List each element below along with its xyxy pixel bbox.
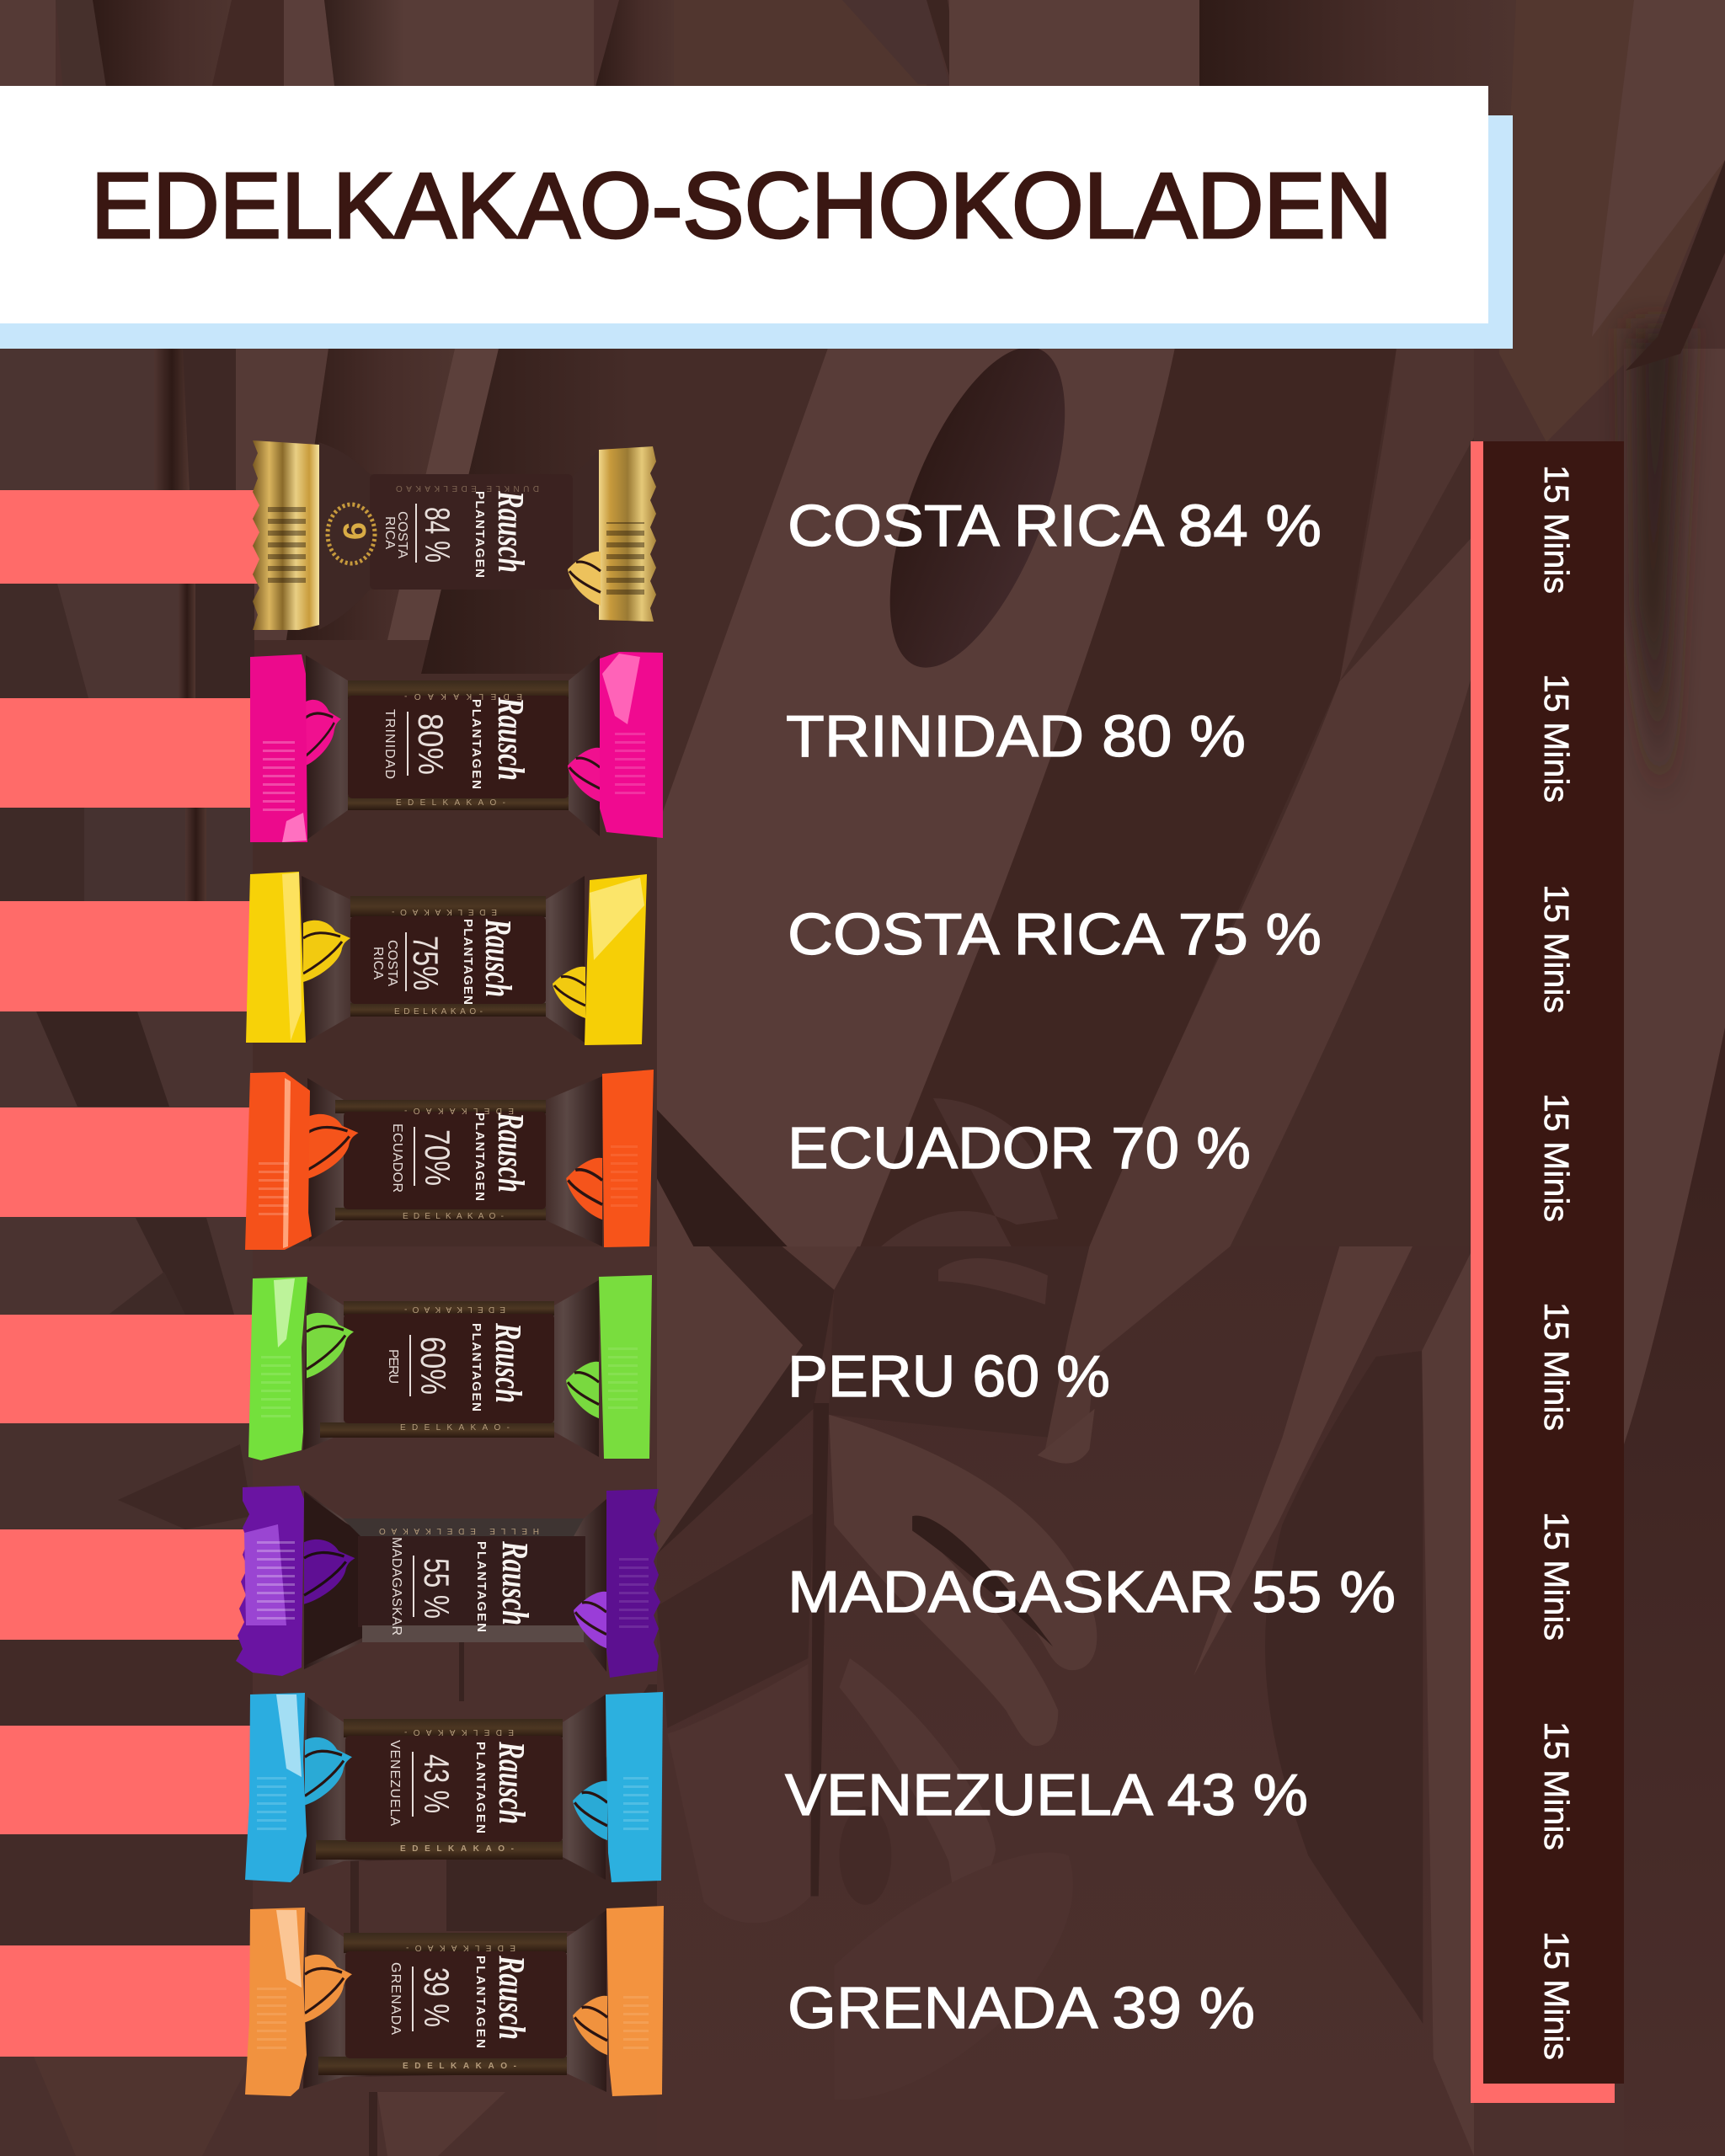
background: candy gap detail [350, 1642, 657, 2156]
candy: Trinidad 80 pink: EDELKAKAO- [404, 691, 522, 701]
candy: Grenada 39 light orange: 39 % [417, 1967, 457, 2027]
candy: Costa Rica 75 yellow: RICA [371, 947, 385, 979]
candy: Madagaskar 55 purple: HELLE EDELKAKAO [379, 1526, 539, 1535]
candy: Trinidad 80 pink [250, 652, 663, 842]
gold left flap [253, 440, 319, 630]
background: central leaf with hole [657, 320, 1474, 1246]
chocolate name labels: PERU 60 % [788, 1343, 1110, 1409]
panel text: 15 Minis [1537, 1512, 1576, 1641]
candy: Madagaskar 55 purple: 55 % [417, 1558, 457, 1619]
panel dark block [1483, 441, 1624, 2084]
candy: Grenada 39 light orange: EDELKAKAO- [406, 1943, 515, 1952]
coral bars [0, 490, 263, 2057]
candy: Ecuador 70 orange [245, 1070, 654, 1250]
background: right-hand column [1624, 160, 1725, 2156]
candy: Peru 60 green: Rausch [488, 1322, 529, 1403]
chocolate name labels: TRINIDAD 80 % [786, 703, 1246, 769]
chocolate name labels [785, 493, 1396, 2041]
candy: Grenada 39 light orange: Rausch [491, 1955, 532, 2040]
candy: Costa Rica 84 gold: RICA [382, 516, 397, 549]
title panel [0, 86, 1513, 349]
candy: Costa Rica 84 gold: 84 % [418, 507, 457, 563]
seal [328, 504, 375, 563]
candy: Venezuela 43 blue: Rausch [491, 1741, 532, 1824]
chocolate name labels: COSTA RICA 84 % [788, 493, 1322, 558]
green right flap [599, 1275, 652, 1459]
right bean [568, 552, 601, 606]
candy: Grenada 39 light orange: PLANTAGEN [473, 1956, 488, 2048]
yellow left flap [246, 872, 306, 1043]
panel text: 15 Minis [1537, 1931, 1576, 2060]
candy: Venezuela 43 blue [245, 1692, 663, 1882]
label: Rausch [490, 490, 531, 573]
chocolate name labels: VENEZUELA 43 % [785, 1762, 1308, 1828]
candy: Costa Rica 75 yellow: Rausch [478, 918, 519, 997]
candy: Costa Rica 84 gold: DUNKLE EDELKAKAO [396, 483, 539, 493]
light orange right flap [606, 1906, 664, 2096]
candy: Costa Rica 75 yellow: PLANTAGEN [461, 919, 475, 1005]
candy: Madagaskar 55 purple: MADAGASKAR [389, 1537, 403, 1636]
candy: Ecuador 70 orange: EDELKAKAO- [403, 1212, 504, 1221]
candy: Grenada 39 light orange [245, 1906, 664, 2096]
candy: Peru 60 green: EDELKAKAO- [404, 1305, 505, 1314]
candy: Peru 60 green: PLANTAGEN [469, 1323, 483, 1412]
panel text: 15 Minis [1537, 1093, 1576, 1222]
candy: Madagaskar 55 purple [236, 1486, 660, 1678]
candy: Costa Rica 75 yellow [246, 872, 647, 1045]
candy: Peru 60 green [248, 1275, 652, 1460]
green left flap [248, 1277, 307, 1460]
blue right flap [606, 1692, 663, 1882]
candy: Costa Rica 75 yellow: EDELKAKAO- [392, 907, 497, 916]
candy: Peru 60 green: 60% [414, 1337, 453, 1395]
purple left flap [236, 1486, 304, 1676]
candy: Trinidad 80 pink: EDELKAKAO- [396, 798, 505, 808]
pink left flap [250, 654, 307, 842]
left column folds [0, 584, 88, 698]
chocolate name labels: GRENADA 39 % [788, 1975, 1255, 2041]
panel text: 15 Minis [1537, 1721, 1576, 1850]
folds beneath header [0, 349, 154, 490]
candy: Costa Rica 84 gold: COSTA [395, 511, 409, 558]
title shadow block [0, 115, 1513, 349]
chocolate name labels: MADAGASKAR 55 % [788, 1559, 1396, 1625]
candy: Costa Rica 84 gold [253, 440, 656, 630]
panel text: 15 Minis [1537, 674, 1576, 803]
candy: Madagaskar 55 purple: PLANTAGEN [474, 1541, 489, 1632]
background: lower monstera leaf [657, 1246, 1474, 2156]
chocolate name labels: ECUADOR 70 % [788, 1115, 1251, 1181]
candy: Costa Rica 84 gold: PLANTAGEN [473, 491, 487, 578]
panel coral backing [1471, 441, 1615, 2103]
gold right flap [599, 446, 656, 622]
panel text: 15 Minis [1537, 465, 1576, 594]
orange left flap [245, 1072, 312, 1250]
candy: Ecuador 70 orange: EDELKAKAO- [404, 1106, 514, 1115]
candy: Peru 60 green: EDELKAKAO- [400, 1423, 510, 1433]
candy: Costa Rica 84 gold: 9 [336, 522, 371, 540]
candy: Venezuela 43 blue: VENEZUELA [387, 1740, 402, 1826]
title white block [0, 86, 1488, 323]
light orange left flap [245, 1908, 307, 2096]
panel text: 15 Minis [1537, 1302, 1576, 1431]
purple right flap [606, 1489, 660, 1678]
candy: Trinidad 80 pink: TRINIDAD [382, 709, 397, 779]
panel text: 15 Minis [1537, 884, 1576, 1013]
candy: Ecuador 70 orange: ECUADOR [390, 1123, 404, 1193]
blue left flap [245, 1693, 307, 1882]
candy: Venezuela 43 blue: PLANTAGEN [473, 1742, 488, 1833]
candy: Trinidad 80 pink: 80% [411, 713, 451, 775]
yellow right flap [585, 874, 647, 1045]
pink right flap [600, 652, 663, 838]
title text: EDELKAKAO-SCHOKOLADEN [91, 154, 1392, 258]
candy: Trinidad 80 pink: Rausch [490, 696, 531, 781]
candy: Costa Rica 75 yellow: COSTA [385, 940, 399, 986]
panel text [1537, 465, 1576, 2060]
candy: Grenada 39 light orange: EDELKAKAO- [403, 2062, 516, 2071]
candy: Grenada 39 light orange: GRENADA [388, 1962, 403, 2035]
candy: Venezuela 43 blue: EDELKAKAO- [404, 1727, 514, 1737]
candy: Ecuador 70 orange: PLANTAGEN [473, 1113, 487, 1201]
candy: Costa Rica 75 yellow: EDELKAKAO- [394, 1007, 483, 1017]
candy: Ecuador 70 orange: Rausch [490, 1112, 531, 1193]
candy: Venezuela 43 blue: 43 % [417, 1754, 457, 1813]
candy: Costa Rica 75 yellow: 75% [406, 936, 446, 990]
candy: Trinidad 80 pink: PLANTAGEN [469, 699, 483, 789]
orange right flap [602, 1070, 654, 1247]
side panel: pack sizes [1471, 441, 1624, 2103]
candy: Madagaskar 55 purple: Rausch [494, 1540, 536, 1625]
candy: Venezuela 43 blue: EDELKAKAO- [400, 1844, 514, 1854]
top strip folds [0, 0, 56, 93]
chocolate name labels: COSTA RICA 75 % [788, 901, 1322, 967]
candy: Peru 60 green: PERU [386, 1349, 400, 1384]
candy: Ecuador 70 orange: 70% [418, 1129, 457, 1186]
